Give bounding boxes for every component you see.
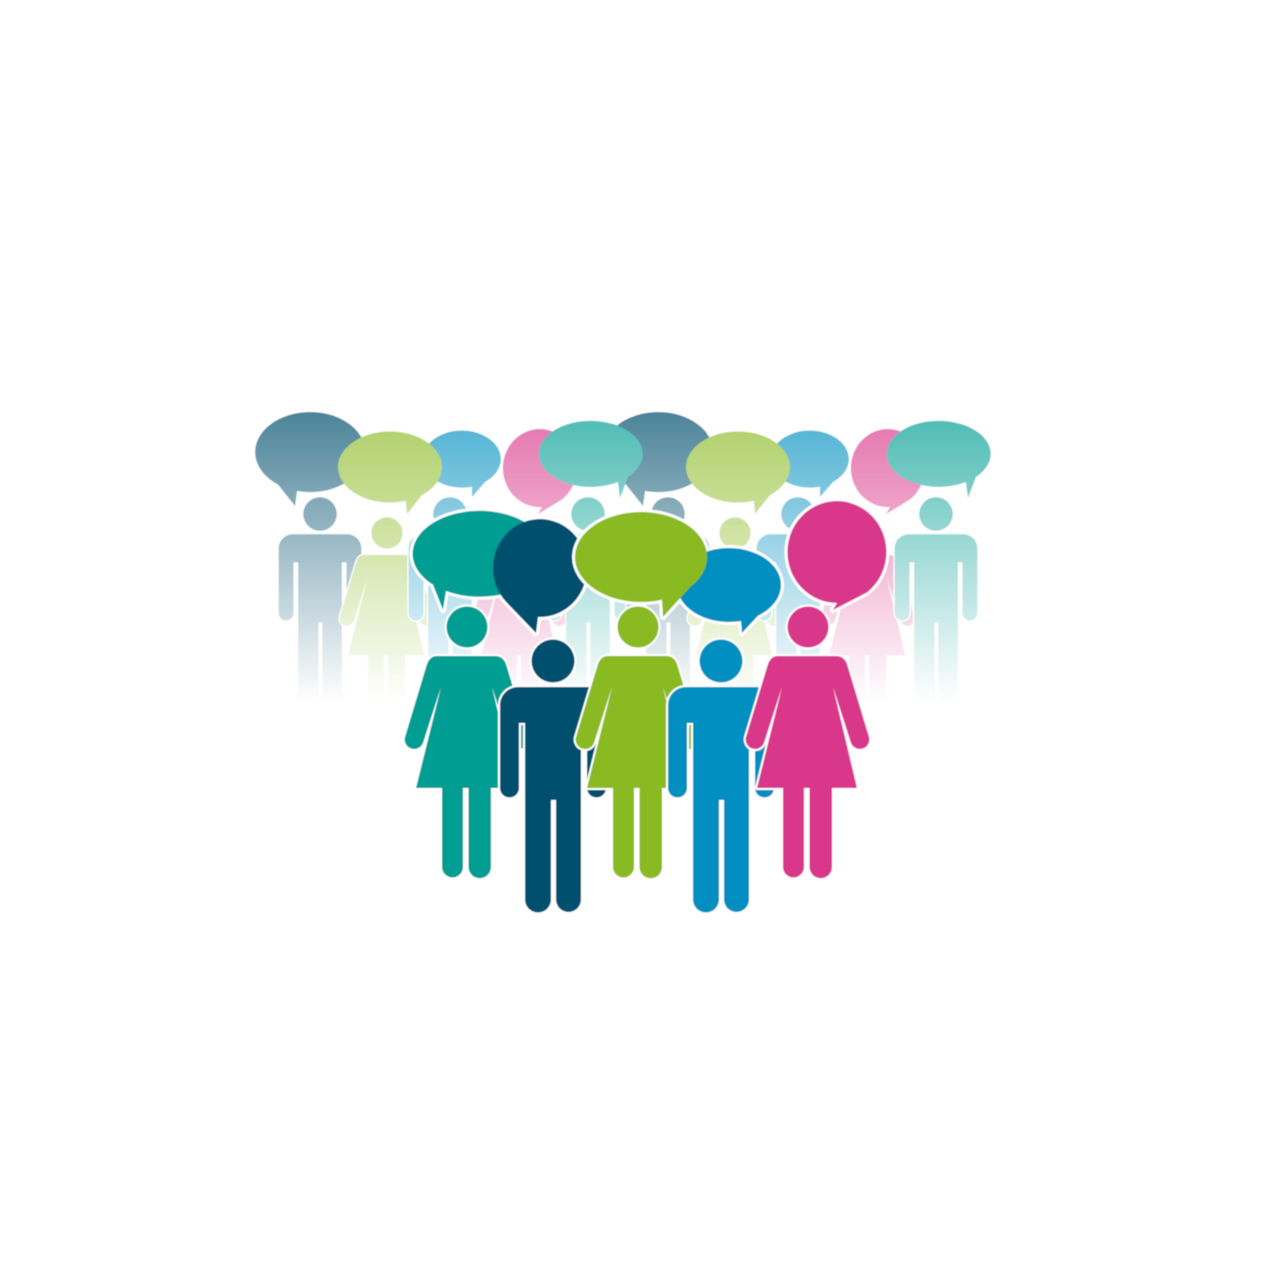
back bubble: teal 2 <box>887 421 991 498</box>
back person: green woman 1 <box>340 517 434 724</box>
person: teal woman <box>405 606 528 878</box>
speech bubble: pink <box>787 501 886 610</box>
person: dark blue man <box>500 640 606 912</box>
back person: grey man 1 <box>279 497 361 710</box>
back person: teal man 1 <box>547 497 629 710</box>
person: green woman <box>576 606 699 878</box>
person: pink woman <box>746 606 869 878</box>
back person: pink woman 2 <box>821 517 915 724</box>
back person: blue man 2 <box>757 497 839 710</box>
back person: grey man 2 <box>627 497 709 710</box>
back bubble: pink 1 <box>503 429 577 514</box>
front row: full colour people <box>405 501 886 912</box>
back person: pink woman 1 <box>473 517 567 724</box>
back bubble: pink 2 <box>851 429 925 514</box>
back bubble: teal 1 <box>539 421 643 498</box>
back bubble: blue 2 <box>771 431 849 497</box>
back bubble: green 1 <box>338 432 442 514</box>
speech bubble: blue <box>677 548 781 633</box>
back bubble: blue 1 <box>423 431 501 497</box>
speech bubble: dark blue <box>493 519 587 633</box>
back person: blue man 1 <box>409 497 491 710</box>
back person: green woman 2 <box>688 517 782 724</box>
speech bubble: green <box>575 512 707 617</box>
back row: faded crowd <box>240 400 1010 761</box>
speech bubble: teal <box>413 511 547 610</box>
person: blue man <box>668 640 774 912</box>
back person: teal man 2 <box>895 497 977 710</box>
back bubble: green 2 <box>686 432 790 514</box>
back bubble: grey 1 <box>255 412 365 506</box>
back bubble: grey 2 <box>603 412 713 506</box>
fade overlay for the back row <box>240 400 1010 702</box>
